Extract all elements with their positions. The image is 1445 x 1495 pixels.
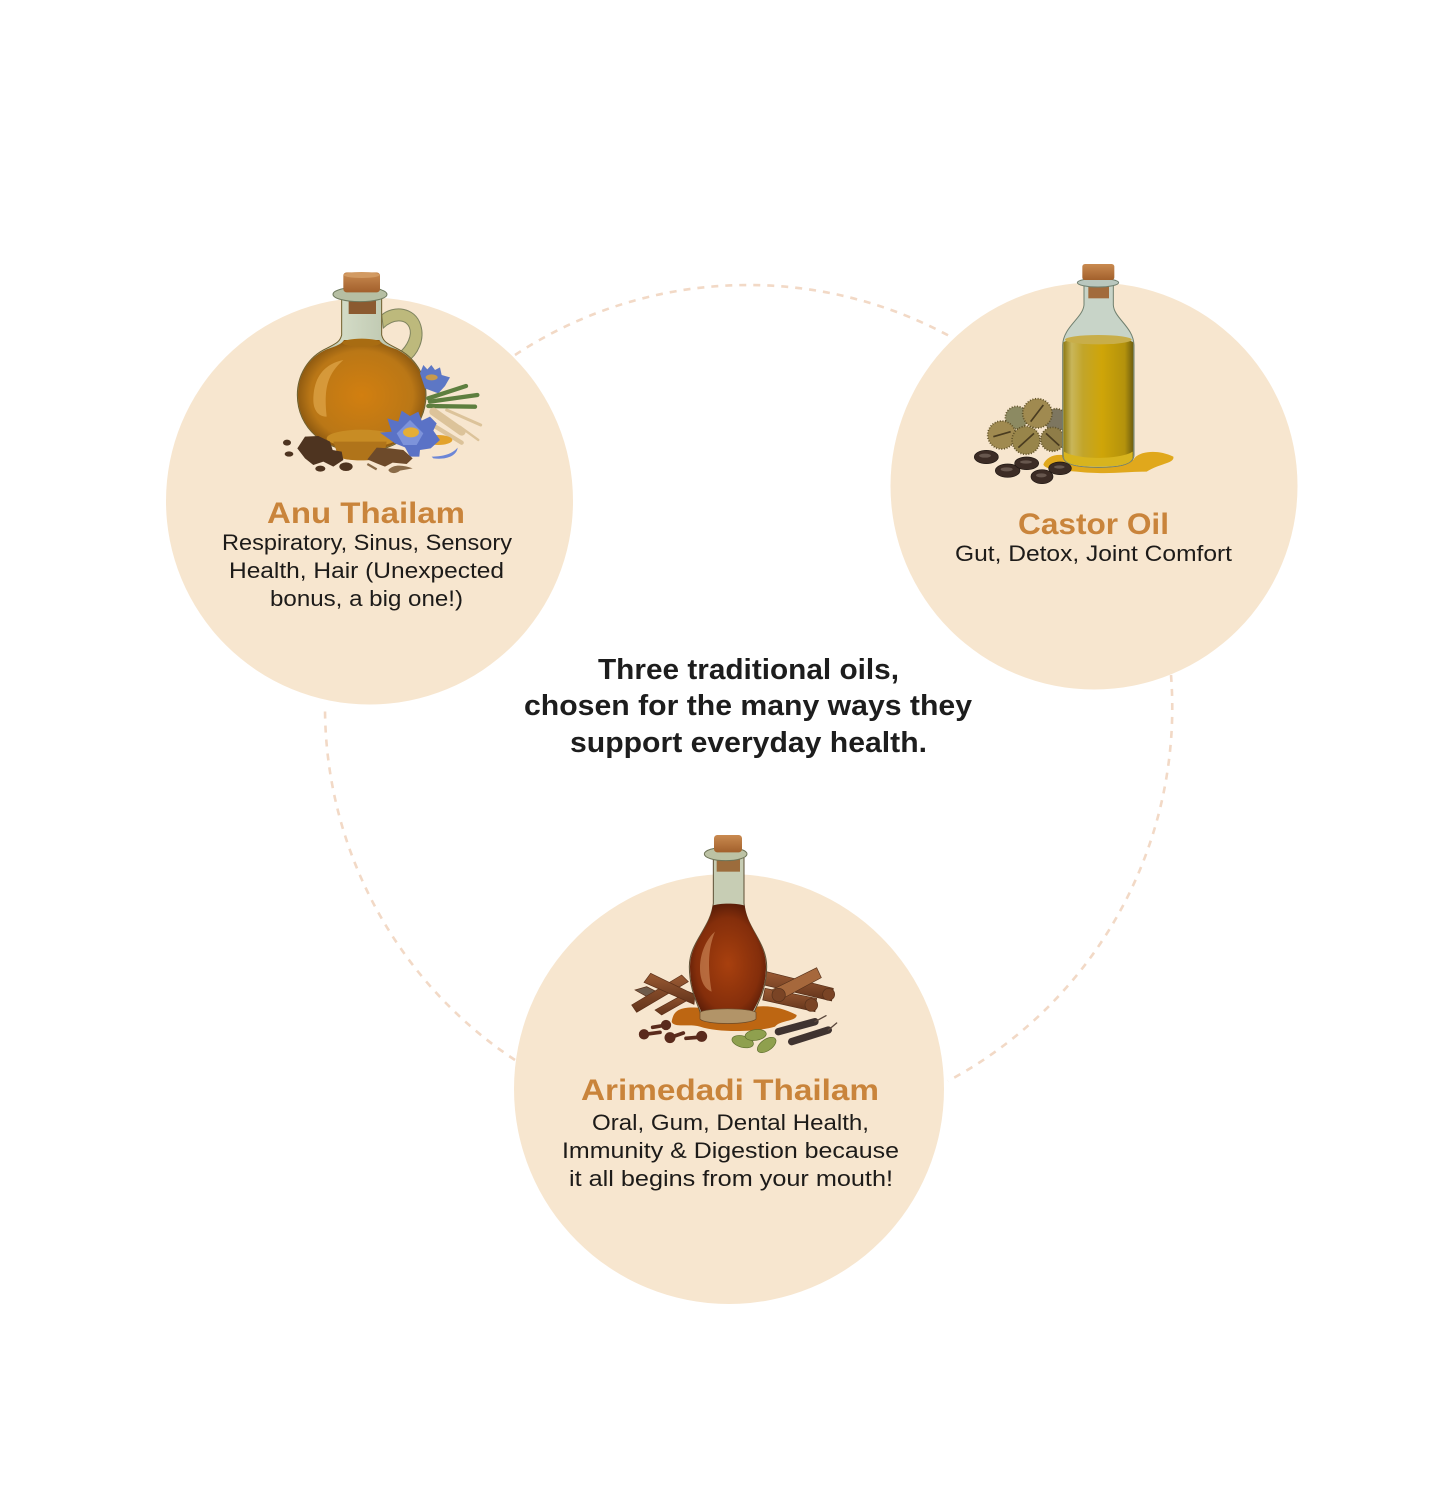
castor pods <box>988 399 1067 454</box>
left cinnamon <box>632 973 697 1015</box>
description: Arimedadi Thailam: it all begins from your mouth! <box>569 1166 893 1191</box>
icon: Anu Thailam jug with lotus and roots <box>283 272 481 473</box>
description: Arimedadi Thailam <box>562 1110 899 1191</box>
oil puddle <box>1043 452 1173 473</box>
white roots <box>430 410 481 443</box>
central statement: Three traditional oils, <box>598 654 899 686</box>
heading: Castor Oil: Castor Oil <box>1018 508 1169 541</box>
oil puddle <box>424 435 452 445</box>
central statement <box>524 654 972 759</box>
description: Arimedadi Thailam: Immunity & Digestion because <box>562 1138 899 1163</box>
cardamom pods <box>731 1028 779 1056</box>
seeds <box>974 450 1071 484</box>
cloves <box>641 1022 705 1041</box>
heading: Arimedadi Thailam: Arimedadi Thailam <box>581 1074 879 1107</box>
long pepper <box>778 1016 837 1042</box>
front lotus <box>380 411 440 457</box>
heading: Anu Thailam: Anu Thailam <box>267 497 465 530</box>
green stems <box>428 386 477 407</box>
description: Anu Thailam: Respiratory, Sinus, Sensory <box>222 530 512 555</box>
glass bottle <box>689 857 767 1023</box>
icon: Arimedadi Thailam bottle with spices <box>632 835 837 1056</box>
upper lotus <box>420 365 450 393</box>
description: Arimedadi Thailam: Oral, Gum, Dental Health, <box>592 1110 869 1135</box>
oil puddle <box>672 1006 797 1031</box>
description: Anu Thailam: Health, Hair (Unexpected <box>229 558 504 583</box>
description: Castor Oil: Gut, Detox, Joint Comfort <box>955 541 1232 566</box>
icon: Castor Oil bottle with pods and seeds <box>974 264 1173 484</box>
right cinnamon <box>763 968 835 1012</box>
dashed connecting ring <box>325 285 1172 1081</box>
central statement: chosen for the many ways they <box>524 690 972 722</box>
panel: Anu Thailam <box>166 272 573 704</box>
circle background <box>166 298 573 704</box>
circle background <box>514 874 944 1304</box>
dark herbs <box>283 436 413 473</box>
description: Anu Thailam: bonus, a big one!) <box>270 586 463 611</box>
central statement: support everyday health. <box>570 727 927 759</box>
circle background <box>890 282 1298 690</box>
panel: Arimedadi Thailam <box>514 835 944 1304</box>
description: Anu Thailam <box>222 530 512 611</box>
panel: Castor Oil <box>890 264 1298 690</box>
glass bottle <box>1063 285 1134 467</box>
